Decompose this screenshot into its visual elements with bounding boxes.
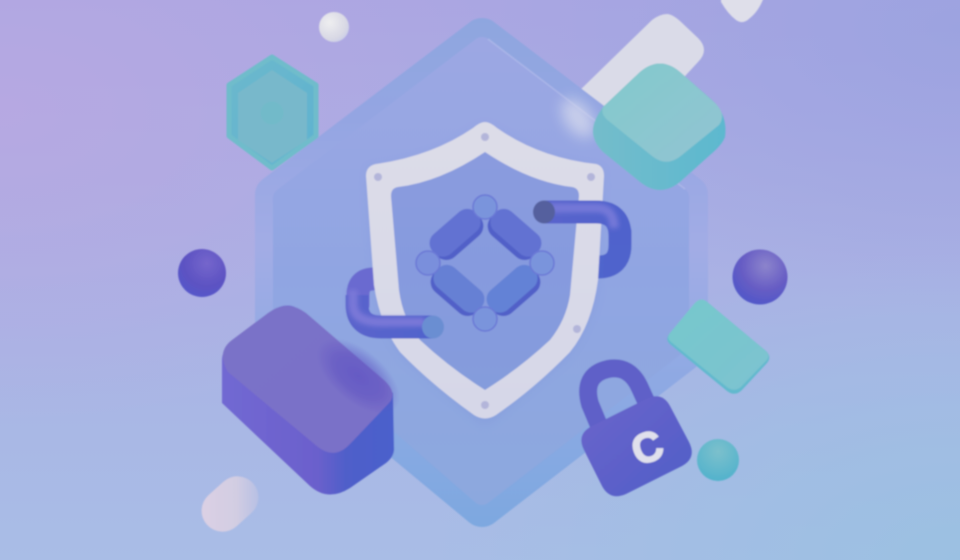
shield rivets xyxy=(374,133,595,409)
diamond chain icon xyxy=(416,195,554,331)
chain link right, upper part over shield xyxy=(533,200,620,245)
floating white pill top right xyxy=(721,0,765,22)
bar top left xyxy=(425,204,489,265)
badge inner hexagon xyxy=(238,70,307,163)
joint bottom xyxy=(473,307,497,331)
padlock xyxy=(581,368,692,496)
lock letter: C xyxy=(625,420,669,475)
joint right xyxy=(530,251,554,275)
chain link left, upper part behind shield xyxy=(358,279,372,305)
lock shackle xyxy=(588,368,650,428)
teal slab right xyxy=(667,300,769,394)
chain link left, lower part over shield xyxy=(353,290,444,338)
joint top xyxy=(473,195,497,219)
bar top right xyxy=(482,204,546,265)
bar bottom right xyxy=(482,260,546,321)
teal block top right xyxy=(593,64,725,190)
purple block xyxy=(222,305,413,495)
link cut end xyxy=(422,316,444,338)
illustration xyxy=(178,0,788,540)
sphere teal bottom right xyxy=(697,439,739,481)
sphere right purple xyxy=(732,250,788,304)
shield shadow xyxy=(370,128,600,424)
sphere top white xyxy=(319,12,349,42)
bar bottom left xyxy=(425,260,489,321)
haze spot on glass panel xyxy=(555,93,601,143)
white pill bottom left xyxy=(193,468,267,540)
glass hexagon panel xyxy=(275,38,688,507)
white tall plate behind teal block xyxy=(575,14,704,125)
lock body xyxy=(581,396,692,496)
chain link right, lower part behind shield xyxy=(598,232,620,267)
link cut end xyxy=(533,200,555,224)
shield xyxy=(366,122,604,418)
sphere left purple xyxy=(178,249,226,297)
badge center dot xyxy=(260,102,284,124)
joint left xyxy=(416,251,440,275)
purple block dark sheen xyxy=(303,324,413,428)
teal hexagon badge xyxy=(229,57,316,168)
